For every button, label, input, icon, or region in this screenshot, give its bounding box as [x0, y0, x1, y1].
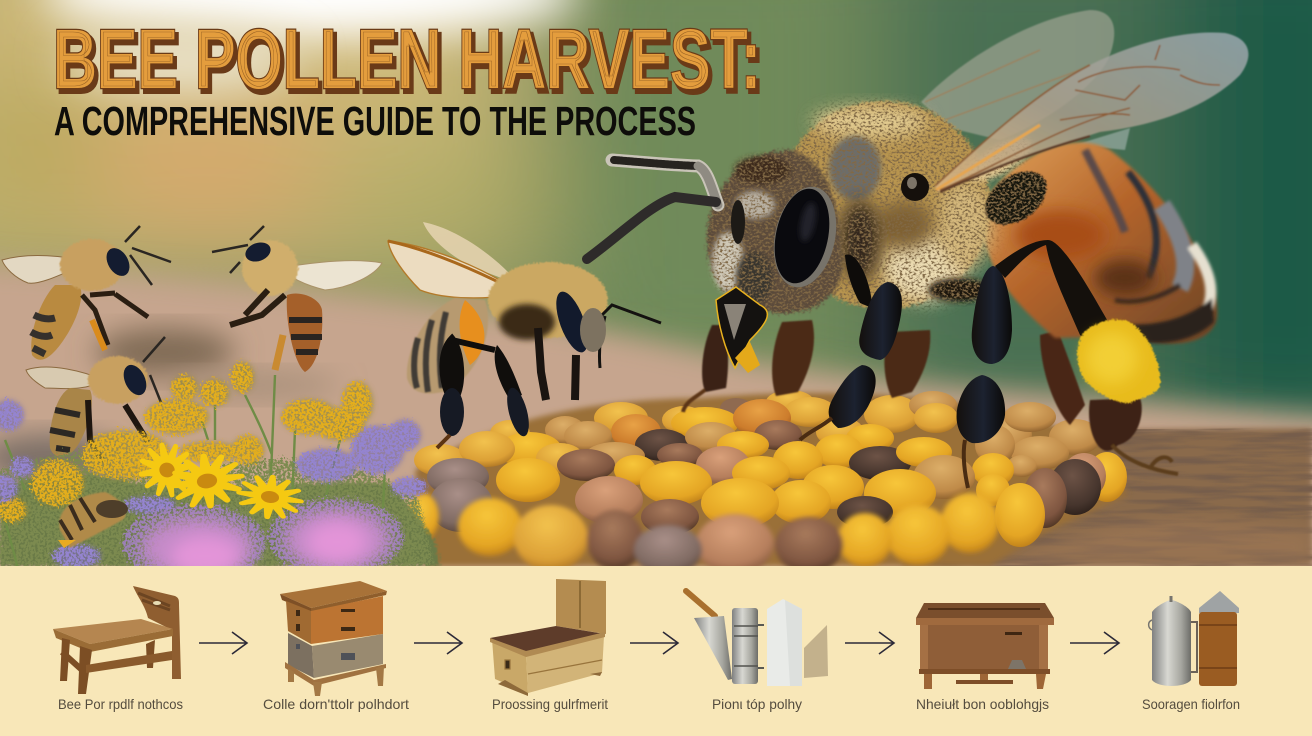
big bee: mouthparts: [716, 287, 767, 373]
big bee: rear legs behind body: [683, 320, 1178, 474]
tool: wooden crate: [916, 603, 1054, 689]
label 4: Pionι tóp polhy: [712, 696, 802, 712]
purple flowers shadow: [0, 400, 428, 567]
arrow 4: [845, 632, 894, 654]
subtitle: A COMPREHENSIVE GUIDE TO THE PROCESS: [54, 98, 696, 144]
small bee top centre: [212, 226, 382, 372]
panel: equipment process strip: [0, 566, 1312, 736]
pollen pile rear rows: [414, 390, 1101, 480]
big bee: antennae: [587, 160, 718, 259]
background: blurred meadow and sky: [0, 0, 1312, 566]
pollen basket on hind leg: [1077, 320, 1160, 403]
wooden table: [0, 262, 1312, 600]
arrow 3: [630, 632, 678, 654]
pollen pile middle rows: [427, 446, 1127, 547]
tool: opening box: [490, 579, 606, 696]
pollen pile front row, out of focus: [407, 493, 999, 575]
big bee: head: [707, 150, 929, 313]
pink blurred flowers: [123, 499, 405, 581]
label 5: Nheiułt bon ooblohgjs: [916, 696, 1049, 712]
medium bee: [388, 222, 661, 448]
yellow daisies: [134, 437, 200, 503]
purple flowers: [0, 400, 428, 567]
tool: stacked hive: [280, 581, 387, 696]
meadow foliage: [0, 474, 440, 566]
stems: [5, 375, 385, 566]
big bee: thorax fur: [778, 101, 1056, 309]
yellow flower clusters shadow: [0, 362, 373, 522]
tool: storage canisters: [1149, 591, 1239, 686]
arrow 5: [1070, 632, 1119, 654]
pollen pile underlay: [415, 393, 1128, 566]
big bee: black legs: [829, 240, 1110, 443]
label 2: Colle dorn'ttolr polhdort: [263, 696, 409, 712]
big bee: far wing: [921, 10, 1130, 150]
label 6: Sooragen fiolrfon: [1142, 696, 1240, 712]
wildflower meadow: [0, 362, 440, 581]
foraging bee among flowers: [58, 492, 128, 548]
small bee top left: [2, 226, 171, 360]
big bee: abdomen: [983, 142, 1217, 344]
title: BEE POLLEN HARVEST:: [53, 12, 761, 106]
small bee lower left: [26, 337, 165, 462]
big bee: claws: [800, 418, 968, 488]
title: BEE POLLEN HARVEST:: [56, 16, 764, 110]
arrow 1: [199, 632, 247, 654]
arrow 2: [414, 632, 462, 654]
yellow flower clusters: [0, 362, 373, 522]
label 3: Proossing gulrfmerit: [492, 696, 608, 712]
tool: wooden bench: [53, 586, 181, 694]
tool: bee smoker set: [686, 591, 828, 686]
label 1: Bee Por rpdlf nothcos: [58, 696, 183, 712]
big bee: near wing: [935, 32, 1248, 192]
